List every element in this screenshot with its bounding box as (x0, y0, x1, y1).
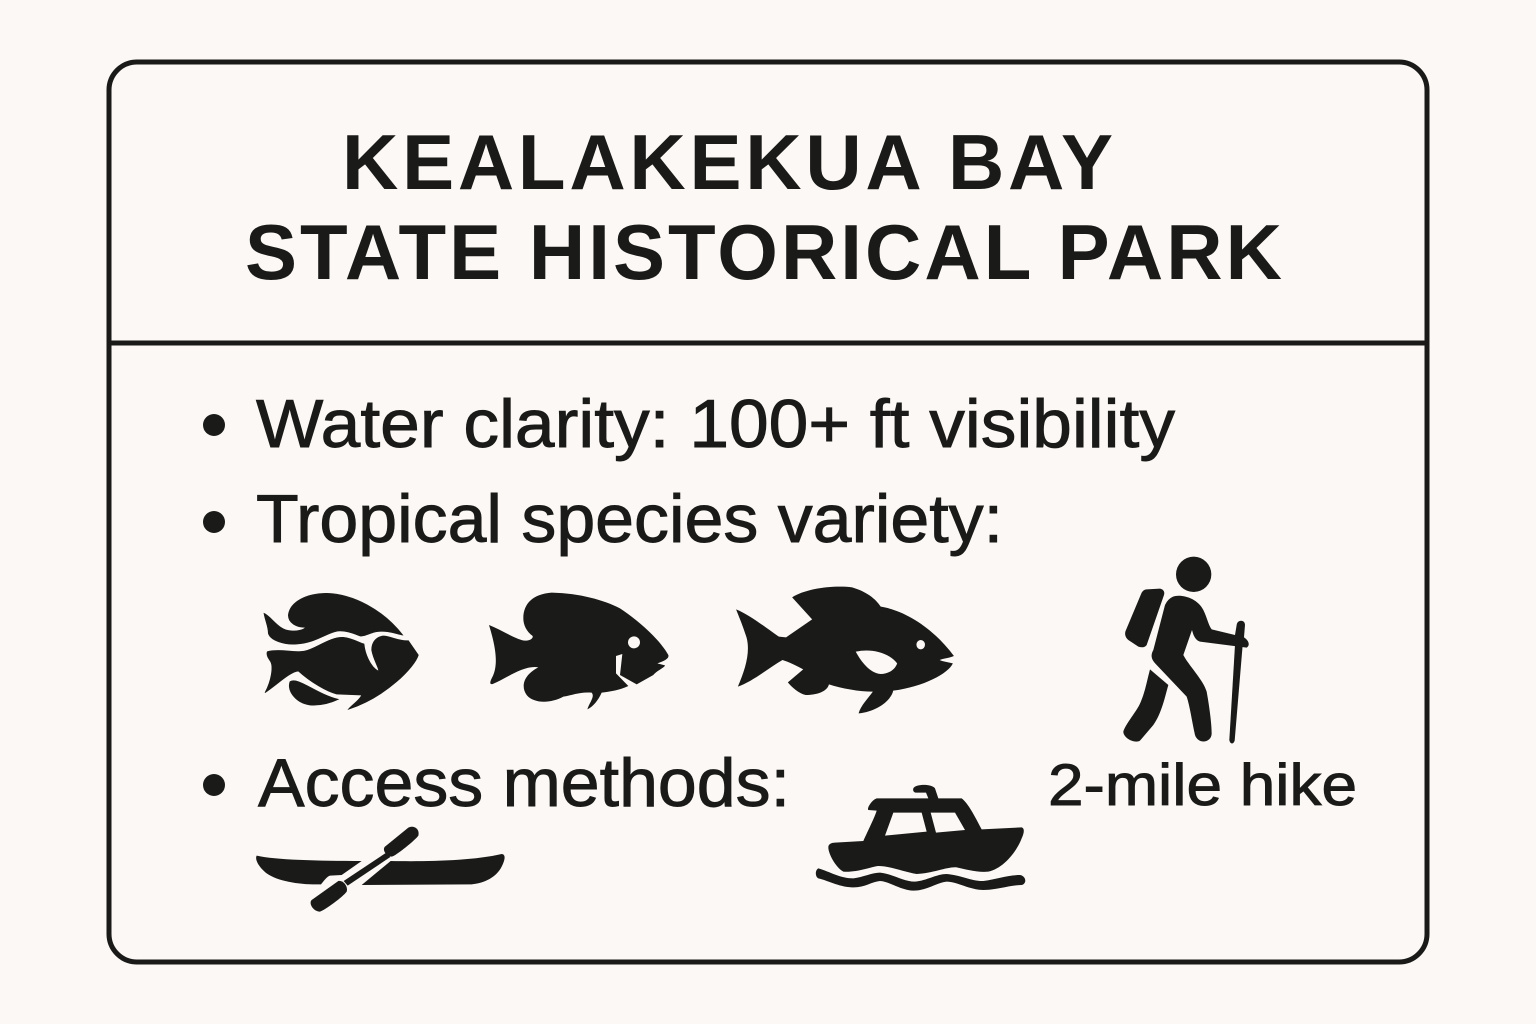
panel: sign frame (109, 62, 1427, 962)
bullet: water clarity: Water clarity: 100+ ft visibility (256, 386, 1175, 462)
title: STATE HISTORICAL PARK (245, 208, 1282, 296)
icon: hiker (1123, 557, 1249, 743)
bullet: tropical species variety: Tropical species variety: (256, 481, 1003, 557)
icon: fish two (489, 593, 668, 709)
bullet: access methods: Access methods: (258, 745, 790, 821)
icon: kayak with paddle (256, 827, 505, 912)
icon: fish one (264, 593, 418, 709)
label: 2-mile hike: 2-mile hike (1048, 753, 1357, 818)
title: KEALAKEKUA BAY (342, 118, 1113, 206)
icon: boat on waves (816, 785, 1025, 891)
title (245, 118, 1282, 296)
icon: fish three (736, 587, 954, 713)
